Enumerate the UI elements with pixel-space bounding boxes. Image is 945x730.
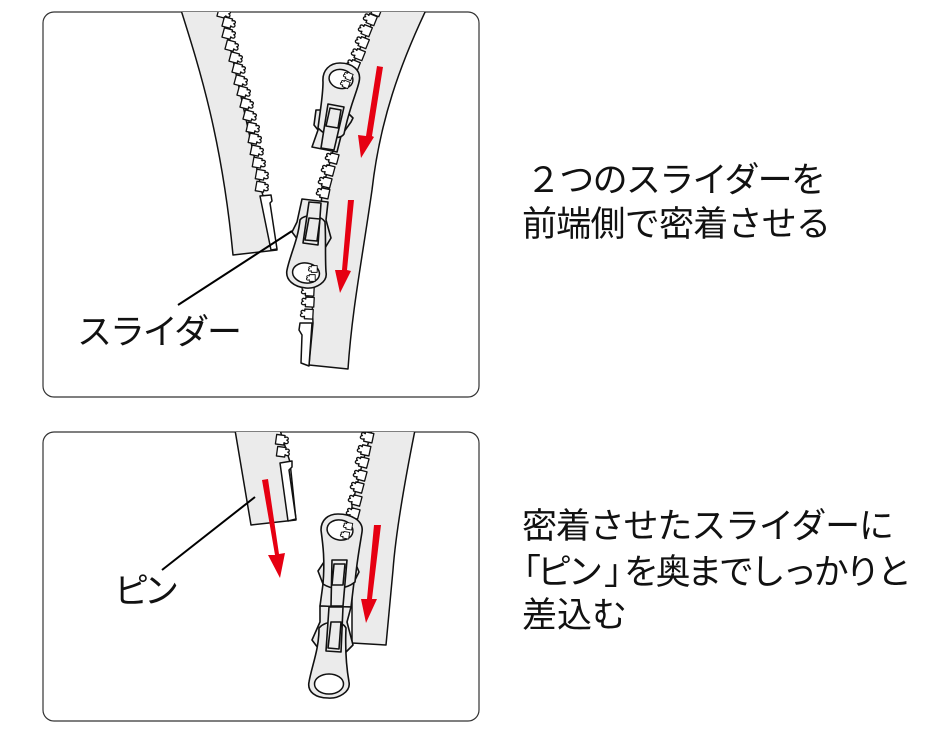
text: step 2 instruction: 「 [506, 553, 541, 592]
upper slider [318, 514, 362, 607]
upper slider [312, 63, 360, 152]
right tape [352, 430, 415, 645]
arrow: lower [335, 200, 354, 293]
panel: step 2 illustration [43, 430, 479, 721]
text: step 2 instruction: 」 [604, 553, 639, 592]
text: step 2 instruction: 密着させたスライダーに [522, 507, 894, 546]
text: step 2 instruction: 差込む [522, 596, 627, 635]
text: step 2 instruction [506, 507, 912, 635]
text: step 2 instruction: ピン [537, 553, 603, 592]
arrow: upper [358, 66, 383, 158]
lower slider with zipper pull [309, 606, 353, 698]
text: step 1 instruction [522, 161, 831, 244]
arrow: slider direction [361, 525, 381, 623]
leader line: slider [178, 231, 292, 305]
lower slider with zipper pull [287, 199, 331, 288]
right tape teeth [300, 3, 382, 319]
label: pin: ピン [114, 572, 179, 611]
left tape teeth [275, 434, 290, 458]
white pin strip, left tape [260, 195, 277, 250]
left tape teeth [217, 7, 269, 193]
zipper right tape [309, 10, 426, 369]
label: slider: スライダー [77, 313, 242, 352]
leader line: pin [162, 497, 255, 570]
panel: step 1 illustration [43, 3, 479, 397]
text: step 1 instruction: ２つのスライダーを [526, 161, 826, 200]
pin box, right tape [299, 323, 312, 366]
text: step 1 instruction: 前端側で密着させる [522, 205, 831, 244]
zipper left tape [181, 3, 426, 369]
right tape teeth [346, 431, 374, 519]
white pin strip [280, 461, 296, 521]
left tape with pin [235, 430, 296, 525]
arrow: pin direction [262, 479, 285, 578]
text: step 2 instruction: を奥までしっかりと [624, 553, 912, 592]
